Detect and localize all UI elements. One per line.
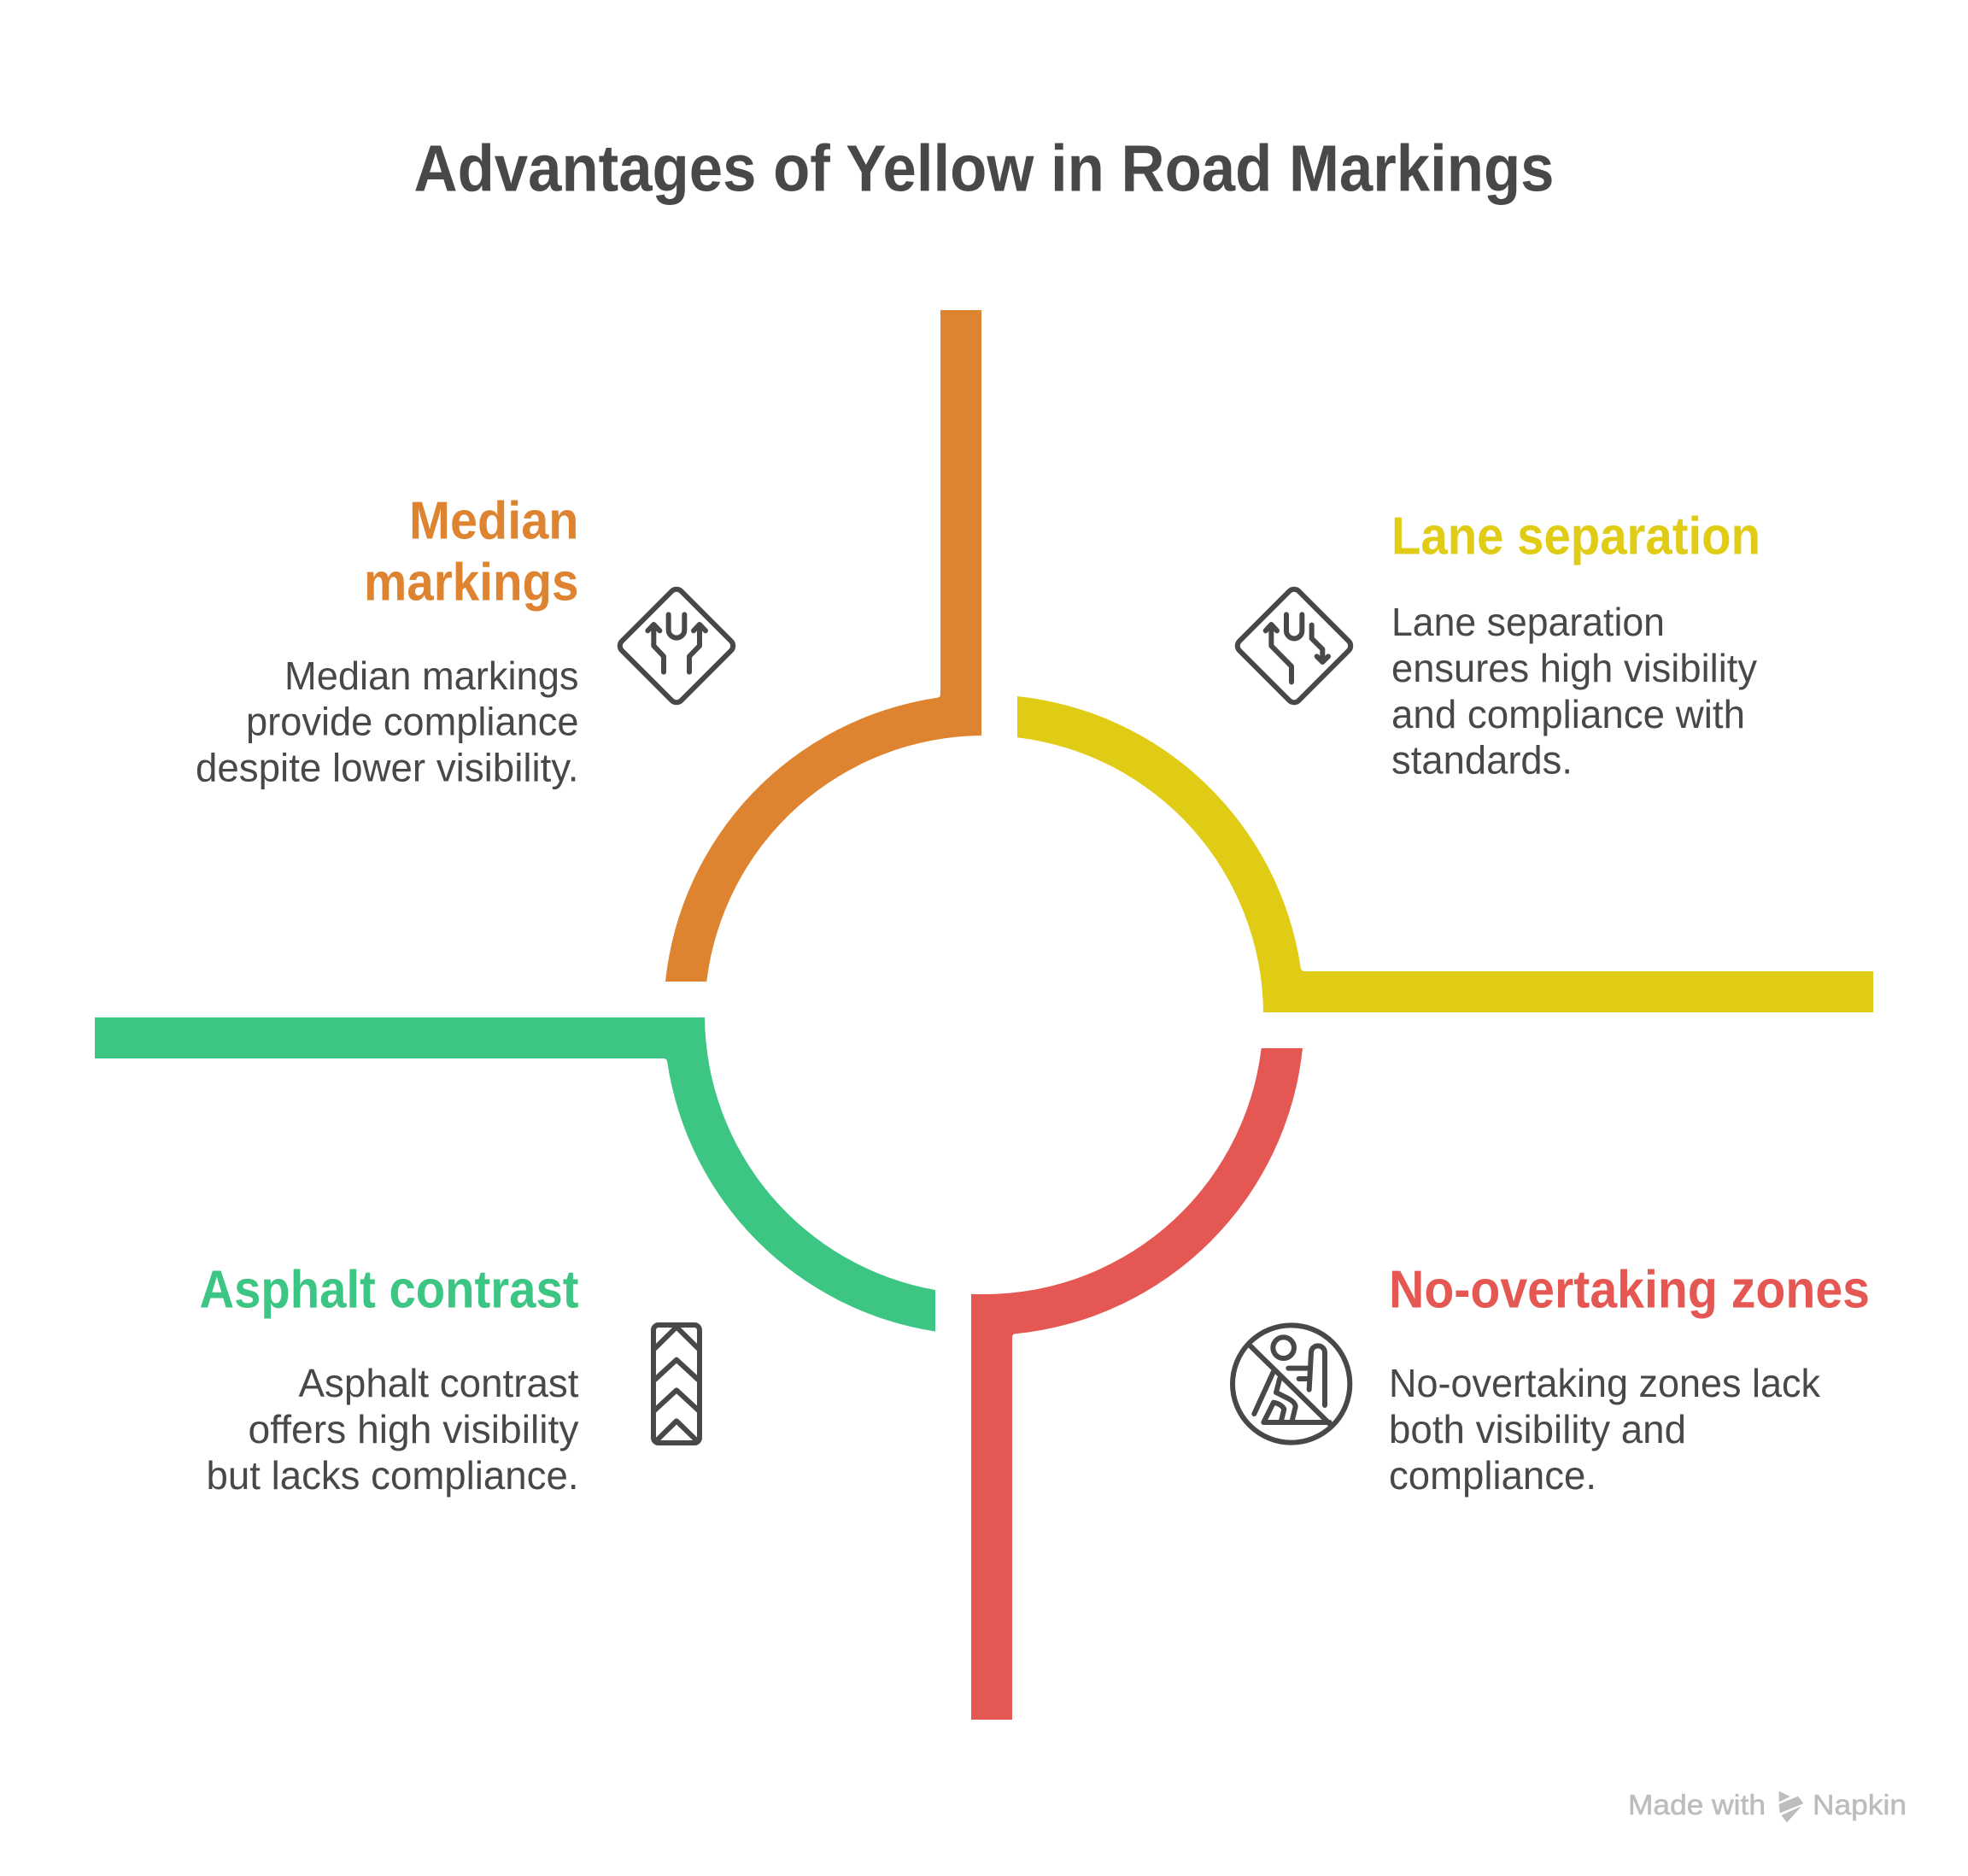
ring segment: orange, median markings	[665, 310, 981, 982]
icon: no overtaking sign	[1233, 1325, 1350, 1443]
heading: median markings	[364, 492, 579, 612]
text: asphalt contrast description: offers high visibility	[248, 1407, 579, 1451]
ring segment: red, no-overtaking zones	[971, 1048, 1303, 1720]
heading: median markings: Median	[409, 492, 579, 550]
heading: lane separation: Lane separation	[1391, 507, 1760, 566]
text: no-overtaking zones description: No-overtaking zones lack	[1389, 1361, 1821, 1405]
panel: asphalt contrast	[200, 1261, 700, 1498]
icon: chevron strip	[653, 1325, 700, 1443]
text: lane separation description: and compliance with	[1391, 692, 1745, 736]
panel: median markings	[196, 492, 736, 789]
text: lane separation description	[1391, 600, 1757, 783]
text: asphalt contrast description	[207, 1361, 579, 1498]
text: no-overtaking zones description: both visibility and	[1389, 1407, 1686, 1451]
panel: no-overtaking zones	[1233, 1261, 1870, 1498]
footer: made with napkin	[1628, 1789, 1906, 1822]
footer: made with napkin: Napkin	[1813, 1789, 1906, 1820]
icon: two-way lanes sign	[1234, 586, 1354, 706]
footer: made with napkin: Made with	[1628, 1789, 1766, 1820]
text: median markings description: despite lower visibility.	[196, 745, 579, 789]
text: no-overtaking zones description	[1389, 1361, 1821, 1498]
heading: median markings: markings	[364, 554, 579, 612]
ring segment: yellow, lane separation	[1017, 696, 1873, 1012]
title: Advantages of Yellow in Road Markings	[413, 132, 1555, 205]
ring segment: green, asphalt contrast	[95, 1017, 935, 1332]
heading: asphalt contrast: Asphalt contrast	[200, 1261, 579, 1319]
text: asphalt contrast description: Asphalt contrast	[299, 1361, 579, 1405]
icon: napkin logo	[1779, 1791, 1803, 1822]
text: median markings description: Median markings	[284, 654, 579, 698]
text: lane separation description: standards.	[1391, 738, 1573, 783]
text: median markings description	[196, 654, 579, 789]
icon: diverging lanes sign	[617, 586, 736, 706]
heading: no-overtaking zones: No-overtaking zones	[1389, 1261, 1870, 1319]
text: asphalt contrast description: but lacks compliance.	[207, 1453, 579, 1498]
text: no-overtaking zones description: compliance.	[1389, 1453, 1596, 1498]
text: lane separation description: ensures high visibility	[1391, 646, 1757, 690]
text: lane separation description: Lane separation	[1391, 600, 1665, 644]
text: median markings description: provide compliance	[246, 699, 579, 743]
panel: lane separation	[1234, 507, 1760, 783]
